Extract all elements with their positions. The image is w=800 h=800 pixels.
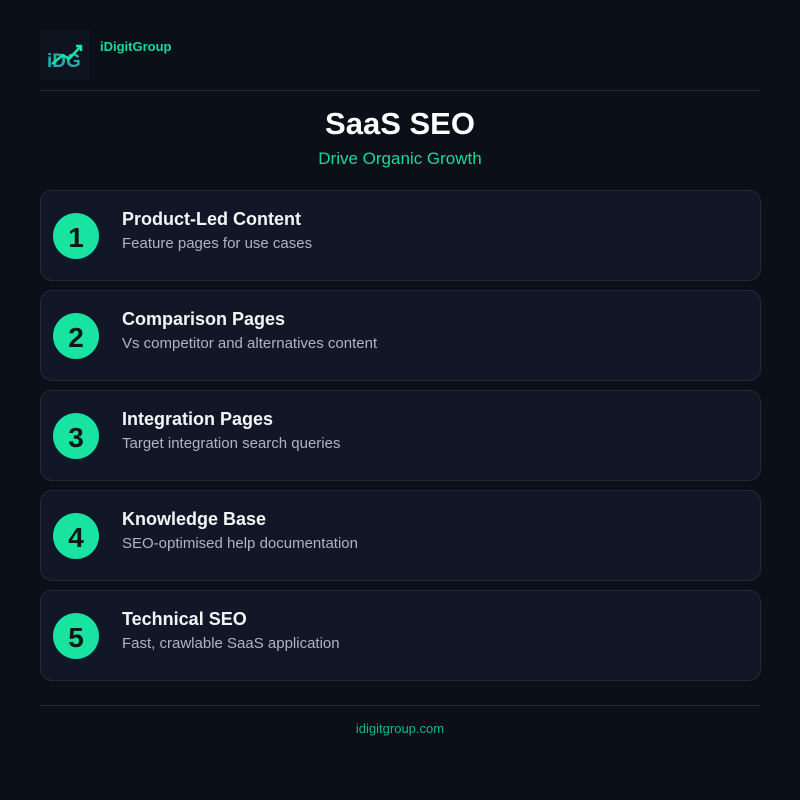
card 1 <box>40 190 761 281</box>
card 5 <box>40 590 761 681</box>
card 2: Comparison Pages <box>122 309 285 329</box>
card 3: Integration Pages <box>122 409 273 429</box>
card 3: Target integration search queries <box>122 435 340 452</box>
logo: iDG <box>47 51 81 72</box>
subtitle: Drive Organic Growth <box>318 149 482 168</box>
card 4 <box>40 490 761 581</box>
card 5: Technical SEO <box>122 609 247 629</box>
card 2: 2 <box>68 322 84 353</box>
brand name: iDigitGroup <box>100 39 172 54</box>
card 1: 1 <box>68 222 84 253</box>
card 2 <box>40 290 761 381</box>
logo <box>40 30 90 80</box>
card 5: Fast, crawlable SaaS application <box>122 635 340 652</box>
card 3: 3 <box>68 422 84 453</box>
card 3 <box>40 390 761 481</box>
card 4: SEO-optimised help documentation <box>122 535 358 552</box>
card 5: 5 <box>68 622 84 653</box>
card 1: Feature pages for use cases <box>122 235 312 252</box>
footer: idigitgroup.com <box>356 721 444 736</box>
title: SaaS SEO <box>325 106 475 141</box>
card 1: Product-Led Content <box>122 209 301 229</box>
card 4: Knowledge Base <box>122 509 266 529</box>
card 4: 4 <box>68 522 84 553</box>
card 2: Vs competitor and alternatives content <box>122 335 377 352</box>
